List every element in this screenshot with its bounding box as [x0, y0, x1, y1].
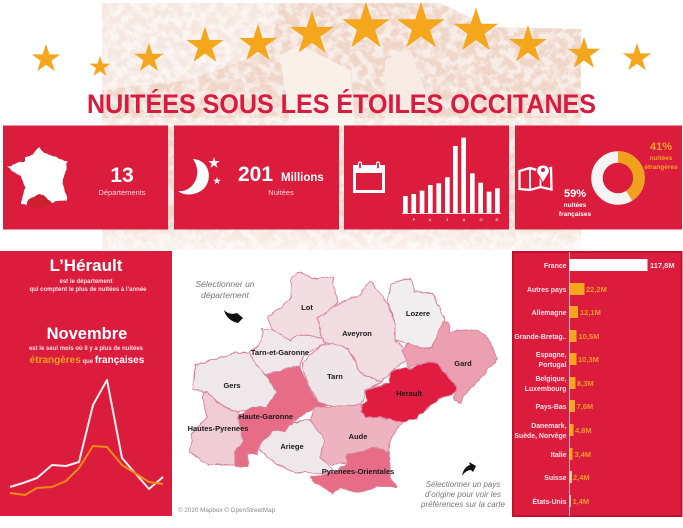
text: novembre: étrangères que françaises: [30, 355, 145, 366]
bar chart: nuitées par mois: F: [413, 217, 416, 222]
stat: 201 millions de nuitées: Nuitées: [268, 188, 294, 197]
bar chart: nuitées par mois: A: [429, 217, 432, 222]
stat: 13 départements: 13: [110, 164, 134, 187]
icon: folded map with pin: [520, 165, 552, 190]
stat: 201 millions de nuitées: Millions: [281, 172, 324, 184]
country values: 7,6M: [576, 402, 593, 411]
arrow: vers le classement: [462, 462, 476, 476]
Gard: [403, 322, 497, 403]
map labels: Aveyron: [342, 329, 372, 338]
map labels: Haute-Garonne: [239, 412, 293, 421]
stat: 201 millions de nuitées: 201: [238, 163, 273, 186]
country values: [572, 261, 675, 506]
country values: 22,2M: [586, 285, 607, 294]
country values: 1,4M: [572, 497, 589, 506]
map labels: Lot: [301, 303, 313, 312]
map labels: Pyrenees-Orientales: [322, 467, 394, 476]
country labels: Italie: [551, 452, 567, 459]
icon: calendar: [353, 162, 385, 192]
Hérault: [360, 362, 457, 422]
heading: Novembre: Novembre: [47, 325, 127, 343]
country labels: Danemark,: [531, 423, 567, 430]
text: département: qui comptent le plus de nuitées à l’année: [29, 287, 147, 293]
bar chart: nuitées par pays: [514, 252, 675, 516]
bar chart: nuitées par mois: [402, 138, 501, 222]
Lozère: [387, 278, 445, 348]
label: 41% étrangères: nuitées: [650, 155, 673, 162]
panel: saisonnalité: [344, 126, 509, 230]
country labels: Belgique,: [535, 376, 567, 383]
Aveyron: [318, 280, 412, 382]
map regions: [190, 272, 497, 493]
heading: L'Hérault: L’Hérault: [50, 256, 123, 275]
country labels: Espagne,: [536, 352, 567, 359]
label: 59% françaises: [559, 188, 591, 218]
Aude: [310, 405, 402, 465]
text: novembre: [29, 346, 145, 366]
Ariège: [258, 420, 335, 473]
map labels: Tarn: [327, 372, 343, 381]
text: novembre: est le seul mois où il y a plus de nuitées: [29, 346, 144, 352]
country labels: Portugal: [539, 362, 567, 369]
title: NUITÉES SOUS LES ÉTOILES OCCITANES: [87, 89, 596, 119]
icon: map of France: [8, 148, 68, 208]
map labels: Hautes-Pyrenees: [188, 424, 248, 433]
text: département: est le département: [59, 279, 113, 285]
panel: nuitées: [174, 126, 339, 230]
map of Occitanie: [188, 272, 497, 493]
Gers: [193, 353, 277, 413]
background photo: [0, 3, 683, 250]
country labels: États-Unis: [532, 497, 567, 506]
bar chart: nuitées par mois: A: [463, 217, 466, 222]
country values: 3,4M: [574, 450, 591, 459]
map labels: Aude: [349, 432, 367, 441]
Haute-Garonne: [235, 367, 328, 466]
country labels: Suède, Norvège: [514, 433, 567, 440]
annotation: sélectionner un pays: d’origine pour voir les: [425, 490, 501, 499]
stars row: [32, 2, 651, 76]
label: 41% étrangères: étrangères: [644, 164, 678, 171]
country labels: Allemagne: [532, 310, 567, 317]
Tarn-et-Garonne: [250, 328, 325, 375]
Tarn: [302, 343, 382, 407]
country labels: Pays-Bas: [535, 404, 567, 411]
bar chart: nuitées par mois: O: [479, 217, 483, 222]
map labels: Herault: [396, 389, 422, 398]
country values: 117,8M: [650, 261, 675, 270]
line chart: [10, 380, 163, 495]
panel: faits marquants: [0, 251, 172, 516]
stat: 13 départements: [98, 164, 146, 197]
arrow: vers la carte: [224, 310, 243, 323]
map labels: Gers: [223, 381, 241, 390]
map labels: Lozere: [406, 309, 430, 318]
annotation: sélectionner un pays: Sélectionner un pays: [426, 480, 500, 489]
label: 41% étrangères: [644, 141, 678, 171]
stat: 13 départements: Départements: [98, 188, 146, 197]
country values: 10,3M: [578, 355, 599, 364]
annotation: sélectionner un pays: préférences sur la carte: [420, 500, 506, 509]
country values: 12,1M: [580, 308, 601, 317]
country labels: [514, 263, 567, 506]
panel: pays d'origine: [513, 252, 682, 516]
annotation: sélectionner un département: Sélectionner un: [195, 279, 255, 289]
Pyrénées-Orientales: [310, 448, 397, 493]
map labels: Tarn-et-Garonne: [251, 348, 309, 357]
country values: 4,8M: [575, 426, 592, 435]
country labels: Suisse: [544, 475, 567, 482]
annotation: sélectionner un département: [195, 279, 255, 300]
country labels: Luxembourg: [525, 386, 566, 393]
country values: 2,4M: [573, 473, 590, 482]
country values: 10,5M: [578, 332, 599, 341]
icon: moon and stars: [178, 157, 221, 195]
label: 59% françaises: nuitées: [564, 202, 587, 209]
label: 59% françaises: françaises: [559, 211, 591, 218]
stat: 201 millions de nuitées: [238, 163, 324, 197]
Hautes-Pyrénées: [190, 392, 243, 465]
bar chart: nuitées par mois: D: [496, 217, 499, 222]
Lot: [268, 272, 338, 340]
donut chart: [597, 157, 639, 199]
label: 59% françaises: 59%: [564, 188, 586, 200]
annotation: sélectionner un département: département: [201, 290, 249, 300]
panel: origine des nuitées: [515, 126, 682, 230]
text: département: [29, 279, 147, 293]
country labels: Grande-Bretag..: [514, 334, 567, 341]
country labels: Autres pays: [527, 287, 567, 294]
map labels: Ariege: [280, 442, 304, 451]
annotation: sélectionner un pays: [420, 480, 506, 509]
bar chart: nuitées par mois: J: [446, 217, 448, 222]
label: 41% étrangères: 41%: [650, 141, 672, 153]
map attribution: © 2020 Mapbox © OpenStreetMap: [178, 506, 276, 514]
panel: départements: [3, 126, 168, 230]
map labels: Gard: [454, 359, 472, 368]
country values: 8,3M: [577, 379, 594, 388]
map labels: [188, 303, 472, 476]
country labels: France: [544, 263, 567, 270]
